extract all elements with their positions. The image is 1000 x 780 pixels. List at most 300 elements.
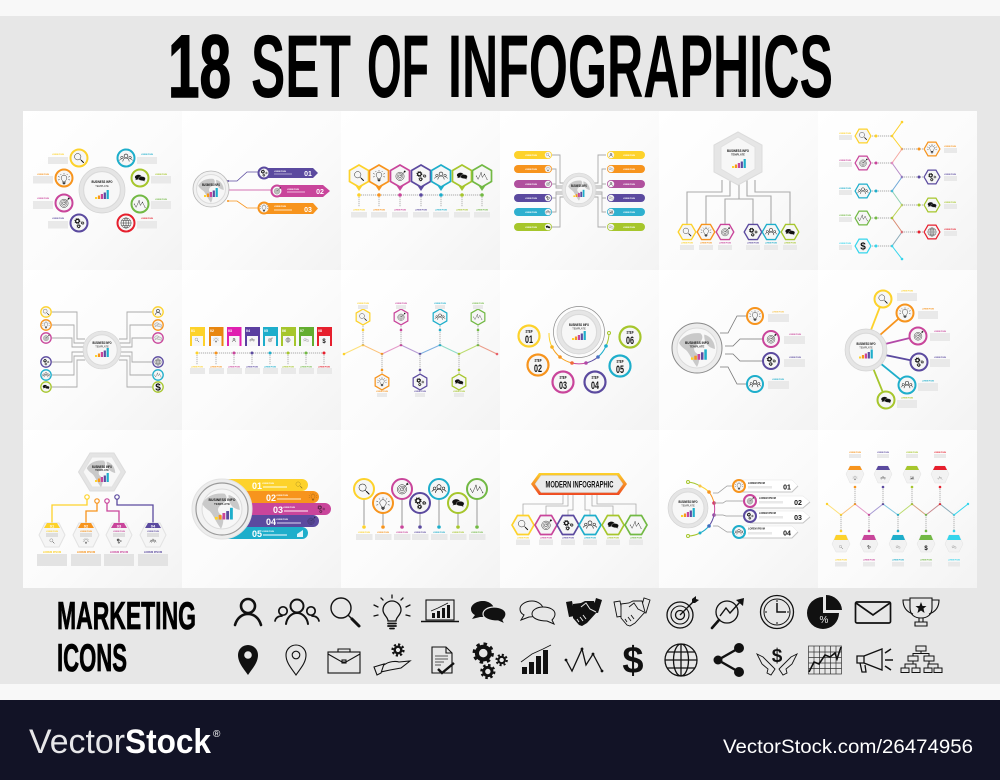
icon: trophy bbox=[903, 598, 939, 626]
central circle bbox=[554, 306, 604, 358]
hub: BUSINESS INFO bbox=[571, 184, 587, 188]
branch 4: LOREM IPSUM bbox=[144, 550, 162, 554]
left pills: LOREM IPSUM bbox=[525, 184, 538, 186]
right: gears bbox=[902, 170, 957, 184]
step 03 bbox=[552, 372, 574, 392]
hex: wave bbox=[625, 516, 647, 545]
branch: target: LOREM IPSUM bbox=[789, 334, 802, 336]
right pills: LOREM IPSUM bbox=[623, 155, 636, 157]
step: team bbox=[432, 165, 450, 218]
top hexagon bbox=[78, 453, 126, 491]
right pills: LOREM IPSUM bbox=[623, 184, 636, 186]
bottom: idea: LOREM IPSUM bbox=[376, 391, 389, 393]
central circle: BUSINESS INFO bbox=[569, 323, 589, 327]
step: chat: LOREM IPSUM bbox=[456, 210, 469, 212]
node: idea: LOREM IPSUM bbox=[37, 174, 50, 176]
right: idea: LOREM IPSUM bbox=[944, 146, 957, 148]
badge bottom 5 bbox=[945, 515, 963, 566]
hub: BUSINESS INFO bbox=[92, 341, 112, 345]
bottom: gears: LOREM IPSUM bbox=[414, 391, 427, 393]
icon: clock bbox=[760, 596, 794, 628]
hub with world map bbox=[193, 171, 229, 207]
footer image id: VectorStock.com/26474956 bbox=[723, 737, 973, 758]
panel 15: staggered circle timeline bbox=[341, 430, 500, 588]
zigzag spine bbox=[892, 122, 902, 259]
title bbox=[168, 16, 833, 116]
step: search: LOREM IPSUM bbox=[353, 210, 366, 212]
top: search: LOREM IPSUM bbox=[357, 303, 370, 305]
spoke: chat: LOREM IPSUM bbox=[901, 398, 914, 400]
ribbon 03: LOREM IPSUM bbox=[274, 206, 287, 208]
branch 2 bbox=[71, 499, 101, 566]
band 05 bbox=[225, 527, 308, 539]
icon: target bbox=[667, 596, 699, 628]
hex: gears bbox=[557, 516, 579, 545]
heading: marketing icons: ICONS bbox=[57, 637, 127, 680]
card 02 bbox=[209, 327, 224, 374]
ribbon 01: LOREM IPSUM bbox=[274, 171, 287, 173]
child: team bbox=[762, 224, 780, 250]
right: idea bbox=[902, 142, 957, 156]
badge bottom 2 bbox=[860, 515, 878, 566]
hub: BUSINESS INFO bbox=[678, 500, 698, 504]
branch: gears: LOREM IPSUM bbox=[789, 357, 802, 359]
panel 8: coloured cards timeline bbox=[182, 270, 341, 430]
branch 1: 01 bbox=[50, 524, 55, 528]
top: target: LOREM IPSUM bbox=[395, 303, 408, 305]
row 02 bbox=[744, 495, 810, 508]
card 05: LOREM IPSUM bbox=[264, 366, 277, 368]
right: gears: LOREM IPSUM bbox=[944, 174, 957, 176]
badge bottom 1 bbox=[832, 515, 850, 566]
badge bottom 4: LOREM IPSUM bbox=[920, 560, 933, 562]
spoke: idea bbox=[896, 304, 938, 322]
top hexagon: BUSINESS INFO bbox=[92, 465, 112, 469]
hub bbox=[83, 331, 121, 369]
branch 1: LOREM IPSUM bbox=[46, 531, 59, 533]
left: target bbox=[839, 156, 892, 170]
connectors bbox=[227, 172, 272, 208]
step: wave: LOREM IPSUM bbox=[476, 210, 489, 212]
step 06: STEP bbox=[626, 330, 634, 335]
left pills: LOREM IPSUM bbox=[525, 227, 538, 229]
hex: gears: LOREM IPSUM bbox=[562, 538, 575, 540]
timeline line bbox=[197, 352, 325, 354]
badge top 4: LOREM IPSUM bbox=[934, 452, 947, 454]
left: team bbox=[839, 184, 892, 198]
step 02: 02 bbox=[534, 363, 542, 375]
heading: marketing icons: MARKETING bbox=[57, 595, 196, 638]
row 04: 04 bbox=[783, 530, 791, 538]
panel 11: hub with four branches bbox=[659, 270, 818, 430]
badge bottom 2: LOREM IPSUM bbox=[863, 560, 876, 562]
band 04: 04 bbox=[266, 517, 276, 527]
badge top 2 bbox=[874, 452, 892, 504]
panel 2: hub with three ribbons bbox=[182, 111, 341, 270]
banner bbox=[531, 473, 627, 495]
hex: chat bbox=[602, 516, 624, 545]
card 05 bbox=[263, 327, 278, 374]
hex: search bbox=[512, 516, 534, 545]
step: search bbox=[350, 165, 368, 218]
central hub bbox=[79, 167, 125, 213]
card 04: LOREM IPSUM bbox=[246, 366, 259, 368]
badge top 1: LOREM IPSUM bbox=[849, 452, 862, 454]
panel 5: hexagon hierarchy bbox=[659, 111, 818, 270]
step 05: 05 bbox=[616, 364, 624, 376]
spoke: search bbox=[874, 290, 917, 308]
step 06: 06 bbox=[626, 335, 634, 347]
panel 12: radial spokes bbox=[818, 270, 977, 430]
badge top 3: LOREM IPSUM bbox=[906, 452, 919, 454]
connectors bbox=[52, 312, 152, 387]
left: dollar: $ bbox=[860, 242, 866, 252]
band 01: 01 bbox=[252, 481, 262, 491]
step 01: STEP bbox=[526, 329, 532, 334]
step: target bbox=[390, 165, 410, 218]
card 06: 06 bbox=[282, 329, 286, 333]
icon: chat outline bbox=[520, 601, 555, 624]
top: wave bbox=[471, 303, 485, 345]
hex: wave: LOREM IPSUM bbox=[630, 538, 643, 540]
branch 2: 02 bbox=[84, 524, 89, 528]
row 01 bbox=[733, 480, 798, 492]
left: wave bbox=[839, 211, 892, 225]
branch: idea bbox=[747, 308, 789, 324]
row 04: LOREM IPSUM bbox=[748, 528, 765, 530]
row 04 bbox=[733, 526, 798, 538]
icon: chart on grid bbox=[808, 646, 842, 674]
step 05: STEP bbox=[616, 359, 624, 364]
icon: growth bars bbox=[521, 645, 551, 674]
branch 3: LOREM IPSUM bbox=[110, 550, 128, 554]
card 01 bbox=[190, 327, 205, 374]
branch 3 bbox=[104, 499, 134, 566]
icon: team bbox=[275, 600, 319, 624]
ribbon 02 bbox=[272, 185, 330, 197]
hub with map bbox=[192, 479, 252, 539]
step 04: 04 bbox=[591, 380, 600, 392]
card 05: 05 bbox=[264, 329, 268, 333]
child: search: LOREM IPSUM bbox=[681, 242, 694, 244]
branch 4 bbox=[115, 495, 168, 566]
bottom: gears bbox=[413, 354, 427, 397]
icon: gears bbox=[474, 644, 507, 678]
icon: document with check bbox=[432, 647, 454, 673]
node: team bbox=[118, 150, 157, 166]
right pills: LOREM IPSUM bbox=[623, 198, 636, 200]
step: target: LOREM IPSUM bbox=[394, 210, 407, 212]
badge top 1 bbox=[846, 452, 864, 504]
card 07: LOREM IPSUM bbox=[300, 366, 313, 368]
top: search bbox=[356, 303, 370, 345]
zigzag line bbox=[344, 345, 497, 354]
node: wave: LOREM IPSUM bbox=[155, 199, 168, 201]
band 03 bbox=[225, 503, 331, 515]
step: team: LOREM IPSUM bbox=[433, 532, 446, 534]
icon: outline pin bbox=[286, 645, 306, 675]
step: wave bbox=[472, 165, 492, 218]
card 02: 02 bbox=[210, 329, 214, 333]
icon: envelope bbox=[856, 602, 890, 623]
connectors bbox=[720, 316, 763, 384]
central hexagon: BUSINESS INFO bbox=[727, 149, 749, 153]
band 03: 03 bbox=[273, 505, 283, 515]
row 01: LOREM IPSUM bbox=[748, 482, 765, 485]
icon: org chart bbox=[901, 646, 942, 672]
coloured arc with dots bbox=[549, 332, 610, 365]
hub with map bbox=[672, 323, 722, 373]
right circles: $ bbox=[155, 382, 161, 394]
connectors bbox=[713, 486, 744, 532]
step 04 bbox=[584, 372, 606, 392]
step: wave: LOREM IPSUM bbox=[471, 532, 484, 534]
row 03: LOREM IPSUM bbox=[759, 512, 776, 515]
step: gears: LOREM IPSUM bbox=[415, 210, 428, 212]
spoke: chat bbox=[878, 392, 917, 408]
band 02: LOREM IPSUM bbox=[276, 495, 289, 497]
top: target bbox=[394, 303, 408, 345]
hex: search: LOREM IPSUM bbox=[517, 538, 530, 540]
icon: hands with dollar: $ bbox=[772, 646, 783, 667]
branch: team bbox=[747, 376, 789, 392]
connectors bbox=[687, 180, 790, 225]
panel 13: hexagon org chart bbox=[23, 430, 182, 588]
spoke: gears bbox=[910, 354, 950, 370]
child: gears: LOREM IPSUM bbox=[747, 242, 760, 244]
right: globe: LOREM IPSUM bbox=[944, 229, 957, 231]
icon: megaphone bbox=[857, 649, 893, 672]
icon: dollar: $ bbox=[622, 640, 644, 682]
zigzag nodes bbox=[343, 344, 498, 355]
icon: handshake outline bbox=[614, 598, 650, 626]
left pills: LOREM IPSUM bbox=[525, 198, 538, 200]
panel 1: radial eight circles bbox=[23, 111, 182, 270]
step: wave bbox=[467, 479, 487, 540]
ribbon 03: 03 bbox=[304, 207, 312, 214]
footer logo: Vector bbox=[29, 723, 125, 761]
left: search: LOREM IPSUM bbox=[839, 133, 852, 135]
card 06: LOREM IPSUM bbox=[282, 366, 295, 368]
zigzag line bbox=[827, 504, 968, 515]
card 03: LOREM IPSUM bbox=[228, 366, 241, 368]
right pills: LOREM IPSUM bbox=[623, 169, 636, 171]
step: search: LOREM IPSUM bbox=[358, 532, 371, 534]
step 01 bbox=[518, 326, 540, 346]
card 04: 04 bbox=[246, 329, 250, 333]
top: wave: LOREM IPSUM bbox=[472, 303, 485, 305]
card 08: LOREM IPSUM bbox=[318, 366, 331, 368]
step 06 bbox=[620, 326, 640, 348]
top: team bbox=[433, 303, 447, 345]
hub bbox=[668, 488, 708, 528]
connectors bbox=[523, 495, 636, 516]
central hexagon: TEMPLATE bbox=[731, 152, 745, 156]
bottom: chat: LOREM IPSUM bbox=[453, 391, 466, 393]
connectors bbox=[552, 155, 606, 227]
right pills bbox=[607, 151, 645, 231]
branch: gears bbox=[763, 353, 805, 369]
branch 1: LOREM IPSUM bbox=[43, 550, 61, 554]
left pills bbox=[514, 151, 552, 231]
left: wave: LOREM IPSUM bbox=[839, 215, 852, 217]
spoke: search: LOREM IPSUM bbox=[901, 290, 914, 292]
left pills: LOREM IPSUM bbox=[525, 212, 538, 214]
central hub: BUSINESS INFO bbox=[92, 180, 113, 184]
band 04 bbox=[225, 515, 319, 527]
title: OF bbox=[367, 16, 429, 116]
spoke: target: LOREM IPSUM bbox=[934, 331, 947, 333]
badge top 4 bbox=[931, 452, 949, 504]
left: team: LOREM IPSUM bbox=[839, 188, 852, 190]
timeline line bbox=[359, 194, 482, 196]
badge bottom 4: $ bbox=[924, 546, 928, 552]
card 02: LOREM IPSUM bbox=[210, 366, 223, 368]
footer bar bbox=[0, 700, 1000, 780]
card 04 bbox=[245, 327, 260, 374]
icon: person bbox=[235, 599, 261, 625]
node: globe: LOREM IPSUM bbox=[141, 218, 154, 220]
hub with map: BUSINESS INFO bbox=[208, 498, 236, 502]
panel 3: hexagon timeline bbox=[341, 111, 500, 270]
badge bottom 1: LOREM IPSUM bbox=[835, 560, 848, 562]
child: target bbox=[716, 224, 734, 250]
icon: chat solid bbox=[471, 601, 506, 624]
card 07 bbox=[299, 327, 314, 374]
band 02: 02 bbox=[266, 493, 276, 503]
row 03 bbox=[744, 510, 810, 523]
step: team: LOREM IPSUM bbox=[435, 210, 448, 212]
node: target bbox=[33, 194, 72, 212]
ribbon 01 bbox=[258, 168, 318, 178]
spoke: team: LOREM IPSUM bbox=[922, 380, 935, 382]
hub with map: TEMPLATE bbox=[214, 502, 230, 506]
band 02 bbox=[225, 491, 319, 503]
title: SET bbox=[251, 16, 351, 116]
step 03: STEP bbox=[560, 375, 566, 380]
icon: pie chart: % bbox=[820, 615, 829, 626]
top hexagon: TEMPLATE bbox=[95, 468, 109, 472]
left: dollar: LOREM IPSUM bbox=[839, 243, 852, 245]
ribbon 02: 02 bbox=[316, 189, 324, 196]
heading: marketing icons bbox=[57, 595, 196, 680]
step 04: STEP bbox=[592, 375, 598, 380]
icon: laptop chart bbox=[421, 600, 459, 622]
step 03: 03 bbox=[559, 380, 567, 392]
branch 4: LOREM IPSUM bbox=[147, 531, 160, 533]
branch 2: LOREM IPSUM bbox=[77, 550, 95, 554]
zigzag nodes bbox=[826, 503, 969, 516]
badge bottom 4 bbox=[917, 515, 935, 566]
badge top 2: LOREM IPSUM bbox=[877, 452, 890, 454]
node: search bbox=[48, 150, 88, 166]
band 04: LOREM IPSUM bbox=[276, 519, 289, 521]
spoke: team bbox=[898, 376, 938, 394]
hex: target: LOREM IPSUM bbox=[540, 538, 553, 540]
branch 1 bbox=[37, 495, 89, 566]
row 02: LOREM IPSUM bbox=[759, 497, 776, 500]
left circles bbox=[41, 307, 51, 392]
badge top 3 bbox=[903, 452, 921, 504]
branch 4: 04 bbox=[151, 524, 156, 528]
spokes bbox=[871, 299, 919, 400]
left: dollar bbox=[839, 239, 892, 253]
card 08: $ bbox=[322, 339, 326, 345]
band 01: LOREM IPSUM bbox=[262, 483, 275, 485]
central circle: TEMPLATE bbox=[572, 326, 586, 330]
card 01: 01 bbox=[191, 329, 195, 333]
step: target bbox=[392, 479, 412, 540]
hub with map: BUSINESS INFO bbox=[685, 341, 709, 345]
hub bbox=[562, 173, 596, 207]
step: chat: LOREM IPSUM bbox=[452, 532, 465, 534]
step 01: 01 bbox=[525, 334, 533, 346]
hub: TEMPLATE bbox=[681, 504, 695, 508]
card 08: 08 bbox=[318, 329, 322, 333]
step: idea: LOREM IPSUM bbox=[377, 532, 390, 534]
child: chat: LOREM IPSUM bbox=[784, 242, 797, 244]
bottom: chat bbox=[452, 354, 466, 397]
right: chat bbox=[902, 198, 957, 212]
band 03: LOREM IPSUM bbox=[283, 507, 296, 509]
icon: handshake solid bbox=[566, 598, 602, 626]
panel 17: hub with four arrow rows bbox=[659, 430, 818, 588]
bottom: idea bbox=[375, 354, 389, 397]
hub with world map: BUSINESS INFO bbox=[202, 183, 220, 187]
card 07: 07 bbox=[300, 329, 304, 333]
step 05 bbox=[610, 356, 630, 376]
panel 14: hub with five stacked bands bbox=[182, 430, 341, 588]
ribbon 02: LOREM IPSUM bbox=[287, 189, 300, 191]
hub: BUSINESS INFO bbox=[856, 342, 876, 346]
panel 9: horizontal zigzag bbox=[341, 270, 500, 430]
child: gears bbox=[744, 224, 762, 250]
hex: chat: LOREM IPSUM bbox=[607, 538, 620, 540]
spine nodes bbox=[891, 121, 903, 260]
title: 18 bbox=[168, 16, 231, 116]
hub: TEMPLATE bbox=[95, 344, 109, 348]
step: idea: LOREM IPSUM bbox=[373, 210, 386, 212]
step: idea bbox=[373, 493, 393, 540]
icon: briefcase bbox=[328, 649, 360, 673]
panel 4: twelve pills around hub bbox=[500, 111, 659, 270]
left pills: LOREM IPSUM bbox=[525, 155, 538, 157]
child: team: LOREM IPSUM bbox=[765, 242, 778, 244]
band 05: 05 bbox=[252, 529, 262, 539]
central hexagon bbox=[714, 132, 762, 185]
icon: share bbox=[714, 643, 744, 677]
badge bottom 3: LOREM IPSUM bbox=[892, 560, 905, 562]
step: gears bbox=[410, 493, 430, 540]
icon: light bulb bbox=[374, 595, 410, 628]
node: target: LOREM IPSUM bbox=[37, 198, 50, 200]
right circles bbox=[153, 307, 163, 394]
coloured arc with dots bbox=[686, 480, 716, 538]
footer logo: Stock bbox=[125, 723, 211, 761]
icon: magnifier with trend bbox=[712, 598, 744, 628]
hub with map: TEMPLATE bbox=[690, 344, 705, 348]
icon: hand with gear bbox=[374, 644, 410, 675]
panel 7: hub with twelve circles bbox=[23, 270, 182, 430]
child: idea: LOREM IPSUM bbox=[700, 242, 713, 244]
card 06 bbox=[281, 327, 296, 374]
badge bottom 3 bbox=[889, 515, 907, 566]
branch 3: 03 bbox=[117, 524, 122, 528]
row 03: 03 bbox=[794, 515, 802, 522]
branch: idea: LOREM IPSUM bbox=[772, 312, 785, 314]
ribbon 03 bbox=[258, 202, 318, 214]
right: chat: LOREM IPSUM bbox=[944, 202, 957, 204]
